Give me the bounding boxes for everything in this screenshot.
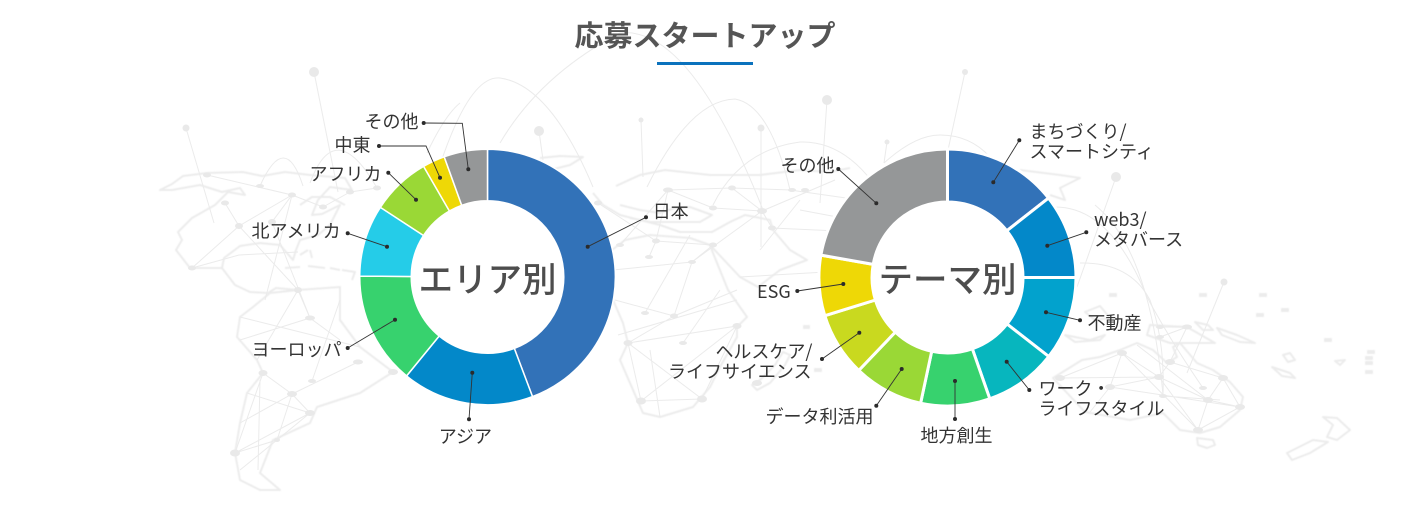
leader: web3	[1045, 230, 1088, 248]
segment: ヘルスケア/ライフサイエンス	[825, 300, 895, 370]
label: その他: その他	[780, 152, 834, 178]
segment: ヨーロッパ	[360, 276, 439, 376]
leader: 北アメリカ	[346, 231, 389, 249]
segment: web3/メタバース	[1007, 198, 1076, 278]
label: 日本: 日本	[653, 198, 689, 224]
panel: area donut chart	[252, 108, 689, 449]
segment: 不動産	[1007, 278, 1076, 357]
label: データ利活用: データ利活用	[766, 403, 874, 429]
label: ヘルスケア/ライフサイエンス: ヘルスケア/	[715, 338, 812, 364]
label: まちづくり/スマートシティ: スマートシティ	[1030, 138, 1154, 164]
label: 不動産: 不動産	[1088, 310, 1142, 336]
leader: データ利活用	[874, 367, 904, 408]
segment: 地方創生	[921, 349, 990, 406]
leader: 不動産	[1044, 310, 1082, 322]
label: web3/メタバース: メタバース	[1094, 226, 1183, 252]
segment: 日本	[488, 149, 615, 397]
title: 応募スタートアップ	[574, 13, 836, 55]
label: ヨーロッパ: ヨーロッパ	[252, 336, 342, 362]
leader: 日本	[586, 215, 648, 249]
map: network lines and arcs	[186, 33, 1240, 470]
label: ワーク・ライフスタイル: ワーク・	[1038, 375, 1110, 401]
label: 地方創生: 地方創生	[920, 422, 992, 448]
leader: ESG	[795, 282, 845, 293]
label: ヘルスケア/ライフサイエンス: ライフサイエンス	[668, 358, 812, 384]
map: continents outlines	[160, 156, 1374, 490]
segment: まちづくり/スマートシティ	[948, 149, 1048, 231]
segment: 北アメリカ	[360, 207, 424, 276]
leader: ヘルスケア	[820, 331, 861, 361]
label: ワーク・ライフスタイル: ライフスタイル	[1038, 395, 1164, 421]
leader: ヨーロッパ	[346, 318, 397, 350]
segment: その他	[444, 149, 488, 205]
segment: アジア	[407, 336, 532, 405]
background: network world map	[160, 33, 1374, 490]
label: まちづくり/スマートシティ: まちづくり/	[1030, 118, 1127, 144]
donut center label: エリア別: エリア別	[418, 252, 556, 302]
leader: アフリカ	[386, 171, 418, 202]
label: ESG: ESG	[757, 278, 791, 304]
label: アジア: アジア	[439, 423, 492, 449]
segment: ワーク・ライフスタイル	[972, 324, 1049, 399]
leader: アジア	[467, 371, 474, 421]
title underline	[657, 62, 753, 65]
donut center label: テーマ別: テーマ別	[878, 252, 1016, 302]
segment: ESG	[819, 255, 875, 316]
leader: ワーク	[1005, 360, 1031, 392]
leader: 地方創生	[953, 379, 957, 421]
label: 中東: 中東	[334, 132, 370, 158]
segment: データ利活用	[859, 332, 932, 403]
leader: その他	[422, 121, 470, 171]
panel: theme donut chart	[668, 118, 1183, 448]
leader: 中東	[377, 144, 442, 180]
label: その他: その他	[364, 108, 418, 134]
label: 北アメリカ: 北アメリカ	[252, 218, 341, 244]
map: network nodes	[182, 67, 1245, 456]
segment: その他	[821, 149, 948, 264]
leader: まちづくり	[991, 138, 1021, 184]
leader: その他	[836, 167, 878, 205]
label: アフリカ: アフリカ	[310, 160, 382, 186]
segment: アフリカ	[380, 166, 449, 236]
segment: 中東	[424, 157, 462, 211]
label: web3/メタバース: web3/	[1094, 206, 1147, 232]
